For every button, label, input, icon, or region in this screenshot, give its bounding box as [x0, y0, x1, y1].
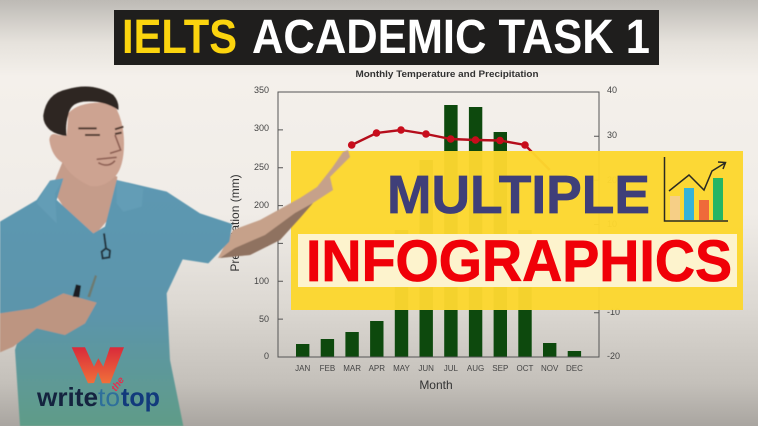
month labels: AUG: [467, 364, 484, 373]
right axis labels: -20: [607, 351, 620, 361]
pens: [73, 284, 81, 297]
right axis labels: 10: [607, 219, 617, 229]
axes frame: [278, 92, 599, 357]
collar: [37, 178, 143, 223]
logo word: the: the: [109, 375, 127, 394]
right axis labels: 20: [607, 175, 617, 185]
logo word: to: to: [98, 382, 120, 412]
right axis labels: 40: [607, 85, 617, 95]
logo mark: red W: [72, 347, 124, 383]
left axis labels: 50: [259, 314, 269, 324]
banner panel: [291, 151, 743, 310]
month labels: JAN: [295, 364, 310, 373]
y axis title: Precipitation (mm): [228, 174, 242, 272]
temperature line: [348, 126, 550, 170]
nose and mouth: [97, 135, 121, 165]
month labels: SEP: [492, 364, 508, 373]
presenter photo illustration: [0, 87, 350, 426]
month labels: FEB: [320, 364, 335, 373]
icon: rising bar chart: [664, 157, 728, 221]
heading: MULTIPLE: MULTIPLE: [387, 165, 650, 225]
extended arm and hand: [218, 150, 350, 258]
left axis labels: 100: [254, 276, 269, 286]
month labels: JUN: [418, 364, 434, 373]
left axis labels: 150: [254, 238, 269, 248]
left axis labels: [254, 85, 269, 361]
month labels: APR: [369, 364, 385, 373]
month labels: MAY: [393, 364, 411, 373]
title bar: [114, 10, 659, 65]
lapel microphone: [102, 233, 110, 258]
month labels: JUL: [444, 364, 459, 373]
logo word: write: write: [36, 382, 98, 412]
chart: monthly temperature and precipitation: [228, 69, 620, 392]
logo word: top: top: [121, 382, 160, 412]
left axis labels: 250: [254, 162, 269, 172]
heading highlight: INFOGRAPHICS: INFOGRAPHICS: [306, 229, 732, 294]
month labels: NOV: [541, 364, 559, 373]
right axis labels: [607, 85, 620, 361]
month labels: DEC: [566, 364, 583, 373]
left axis labels: 200: [254, 200, 269, 210]
left axis labels: 300: [254, 123, 269, 133]
eyebrows and eyes: [78, 127, 123, 135]
title words: ACADEMIC TASK 1: ACADEMIC TASK 1: [252, 11, 650, 64]
left axis labels: 0: [264, 351, 269, 361]
face: [49, 103, 124, 186]
logo: write to the top: [36, 347, 160, 412]
month labels: MAR: [343, 364, 361, 373]
right axis labels: -10: [607, 307, 620, 317]
forearm and hand at waist: [0, 293, 97, 352]
x axis title: Month: [419, 378, 453, 392]
right axis labels: 30: [607, 130, 617, 140]
chart title: Monthly Temperature and Precipitation: [356, 69, 538, 79]
right axis labels: 0: [607, 263, 612, 273]
hair: [43, 87, 118, 136]
neck: [52, 160, 117, 235]
month labels: [295, 364, 583, 373]
precipitation bars: [296, 105, 581, 357]
left axis labels: 350: [254, 85, 269, 95]
title word: IELTS: IELTS: [122, 11, 237, 64]
shirt: [0, 178, 232, 426]
month labels: OCT: [517, 364, 534, 373]
